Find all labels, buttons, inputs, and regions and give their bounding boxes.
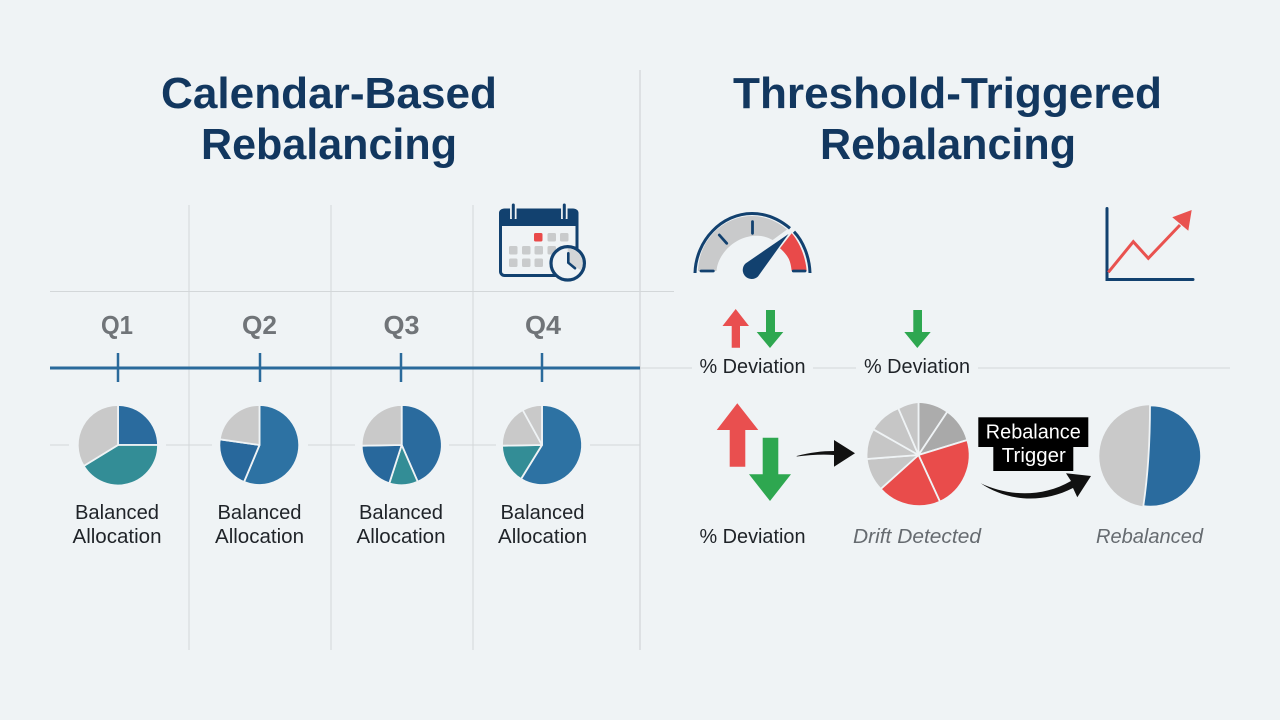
title: calendar-based rebalancing: Calendar-Based: [161, 69, 497, 118]
allocation labels: Balanced: [75, 502, 159, 524]
icon: calendar with clock: [499, 204, 584, 280]
allocation labels: Balanced: [359, 502, 443, 524]
timeline: [50, 353, 640, 382]
arrow: trigger to rebalanced: [981, 473, 1091, 499]
title: threshold-triggered rebalancing: [733, 69, 1162, 169]
quarter labels: Q2: [242, 310, 277, 340]
label: rebalanced: Rebalanced: [1096, 526, 1204, 548]
deviation labels: % Deviation: [700, 356, 806, 378]
quarter labels: Q1: [101, 310, 133, 340]
allocation labels: Allocation: [498, 526, 587, 548]
title: calendar-based rebalancing: Rebalancing: [201, 120, 457, 169]
callout: rebalance trigger: [978, 417, 1088, 471]
title: threshold-triggered rebalancing: Rebalancing: [820, 120, 1076, 169]
allocation labels: Allocation: [215, 526, 304, 548]
deviation labels: % Deviation: [864, 356, 970, 378]
title: threshold-triggered rebalancing: Threshold-Triggered: [733, 69, 1162, 118]
deviation labels: % Deviation: [700, 526, 806, 548]
small deviation arrow: down: [904, 310, 931, 348]
quarter labels: Q3: [384, 310, 420, 340]
allocation labels: Allocation: [72, 526, 162, 548]
allocation labels: Balanced: [500, 502, 584, 524]
arrow: deviation to drift: [797, 440, 855, 467]
allocation labels: Allocation: [356, 526, 446, 548]
allocation labels: Balanced: [218, 502, 302, 524]
pie: Q4 allocation: [502, 405, 582, 485]
small deviation arrows: up and down: [722, 309, 783, 348]
pie: drift detected: [867, 402, 970, 506]
deviation labels: [700, 356, 970, 548]
label: drift detected: Drift Detected: [853, 526, 982, 548]
title: calendar-based rebalancing: [161, 69, 497, 169]
callout: rebalance trigger: Trigger: [1002, 445, 1066, 467]
pie: Q2 allocation: [219, 405, 299, 485]
large deviation arrows: [717, 403, 791, 501]
callout: rebalance trigger: Rebalance: [986, 422, 1081, 444]
quarter labels: [101, 310, 562, 340]
allocation labels: [72, 502, 587, 548]
icon: rising line chart: [1107, 208, 1193, 280]
quarter labels: Q4: [525, 310, 562, 340]
pie: Q1 allocation: [78, 405, 158, 485]
pie: rebalanced: [1099, 405, 1201, 507]
pie: Q3 allocation: [362, 405, 442, 485]
icon: gauge: [695, 214, 810, 279]
